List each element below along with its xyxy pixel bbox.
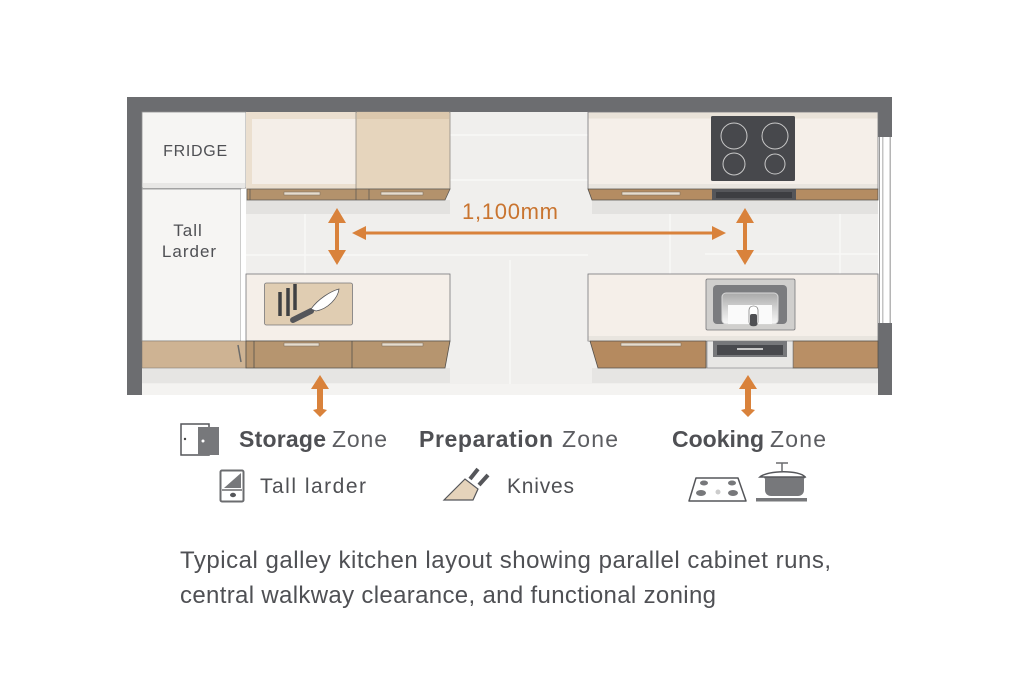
upper left cabinets bbox=[246, 112, 450, 200]
tall larder bbox=[142, 189, 246, 341]
sink bbox=[706, 279, 795, 330]
label: tall larder: Tall larder bbox=[260, 475, 366, 498]
caption: Typical galley kitchen layout showing parallel cabinet runs, bbox=[180, 547, 831, 574]
heading: cooking zone: Cooking bbox=[672, 426, 764, 452]
fridge: FRIDGE bbox=[163, 143, 228, 160]
floor plan bbox=[127, 97, 892, 395]
walls bbox=[127, 97, 892, 395]
heading: storage zone: Zone bbox=[332, 426, 387, 452]
dimension label: 1,100mm bbox=[462, 199, 558, 224]
preparation counter bbox=[246, 274, 450, 368]
arrow: 1,100mm walkway width bbox=[352, 226, 726, 240]
fridge bbox=[142, 112, 246, 188]
icon: tall larder bbox=[220, 470, 244, 502]
arrow: storage pointer bbox=[311, 375, 329, 417]
larder base bbox=[142, 341, 246, 368]
heading: preparation zone: Preparation bbox=[419, 426, 553, 452]
hob vent bbox=[712, 189, 796, 200]
caption: central walkway clearance, and functional zoning bbox=[180, 582, 716, 609]
tall larder: Larder bbox=[162, 242, 217, 261]
icon: cooking pot bbox=[756, 463, 807, 502]
window bbox=[878, 137, 892, 323]
tall larder: Tall bbox=[173, 221, 203, 240]
arrow: right clearance bbox=[736, 208, 754, 265]
dimension arrows bbox=[311, 208, 757, 417]
arrow: cooking pointer bbox=[739, 375, 757, 417]
caption bbox=[180, 547, 831, 609]
icon: doors bbox=[181, 424, 219, 455]
icon: knife block bbox=[444, 469, 488, 500]
heading: cooking zone: Zone bbox=[770, 426, 826, 452]
arrow: left clearance bbox=[328, 208, 346, 265]
heading: storage zone: Storage bbox=[239, 426, 326, 452]
hob bbox=[711, 116, 795, 181]
icon: stovetop bbox=[689, 478, 746, 501]
upper right counter bbox=[588, 112, 878, 200]
heading: preparation zone: Zone bbox=[562, 426, 618, 452]
label: knives: Knives bbox=[507, 475, 574, 498]
lower right counter bbox=[588, 274, 878, 368]
oven bbox=[707, 341, 793, 368]
floor bbox=[142, 112, 878, 395]
cutting board with knives bbox=[264, 283, 352, 325]
